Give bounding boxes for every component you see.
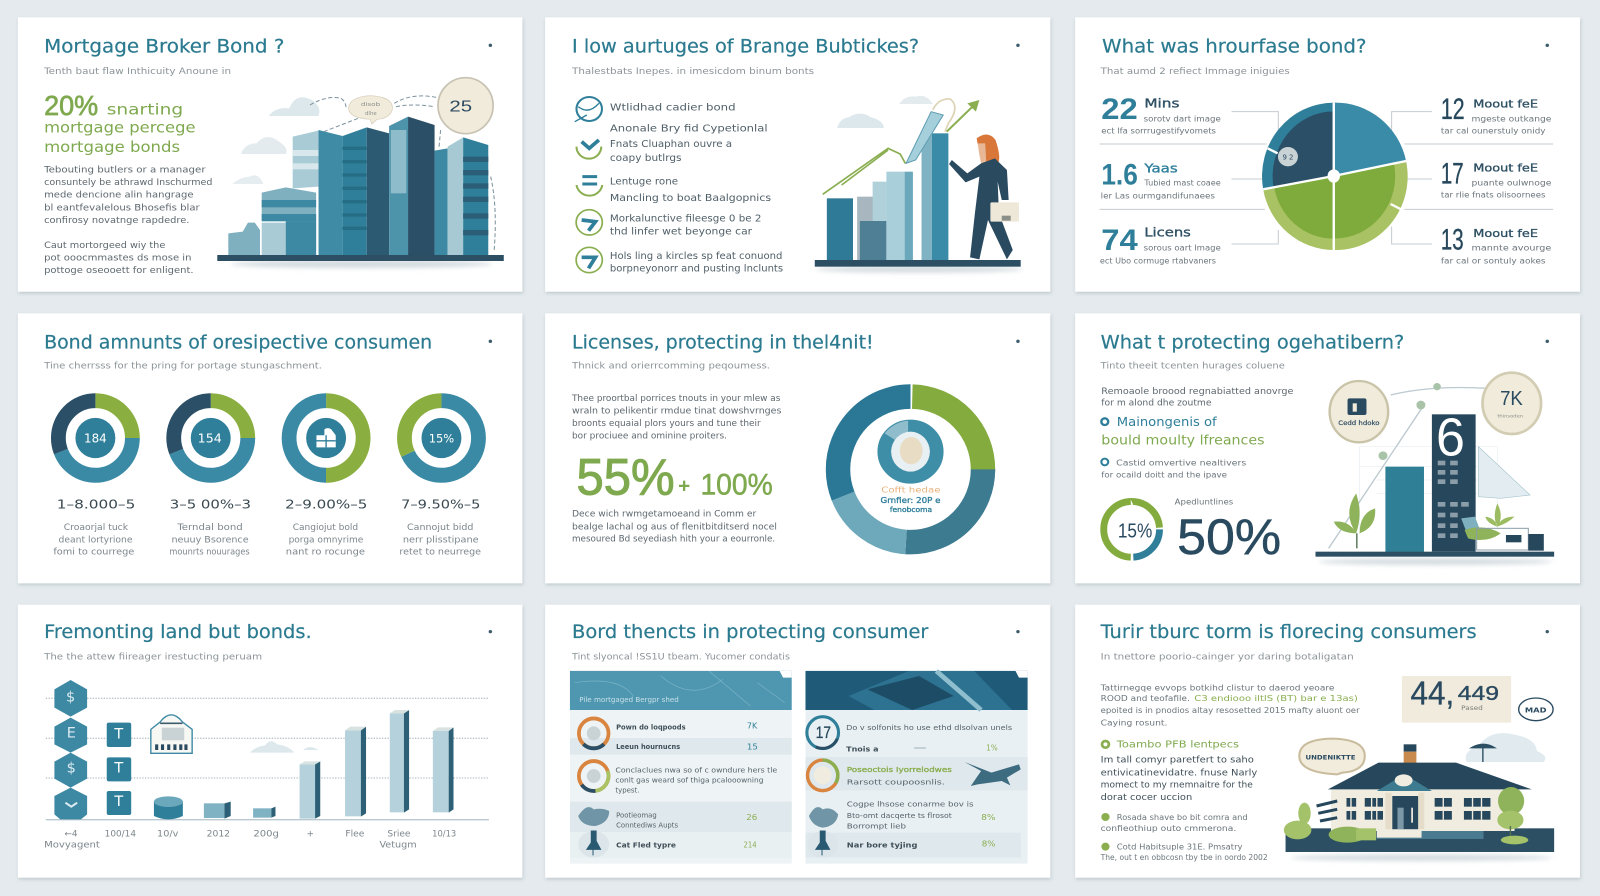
title: Mortgage Broker Bond ?: [44, 35, 284, 58]
right statistics: 12: [1441, 92, 1465, 126]
small bullets: confieothiup outo cmmerona.: [1101, 823, 1236, 833]
bar chart: T: [113, 761, 124, 777]
stat callout: 449: [1458, 683, 1499, 705]
bar chart: T: [113, 794, 124, 810]
inner gauge and labels: fenobcoma: [890, 505, 932, 514]
small bullets: The, out t en obbcosn tby tbe in oordo 2002: [1100, 852, 1268, 862]
left statistics: ect Ubo cormuge rtabvaners: [1100, 255, 1216, 265]
axis labels: Sriee: [387, 830, 410, 840]
panel: turir tburc consumers: [1075, 605, 1580, 878]
right table card: 17: [816, 723, 831, 742]
descriptions: mounrts nouurages: [169, 548, 250, 558]
axis labels: [44, 830, 456, 851]
panel: bond amounts: [18, 313, 522, 583]
right table card: Poseoctois Iyorrelodwes: [847, 765, 952, 774]
list text: Lentuge rone: [610, 177, 678, 188]
subtitle: The the attew fiireager irestucting peruam: [43, 652, 262, 662]
right statistics: Moout feE: [1473, 227, 1538, 240]
left statistics: sorous oart lmage: [1144, 243, 1221, 253]
donut 4: 15%: [429, 431, 454, 446]
intro text: ROOD and teofafile.: [1101, 693, 1190, 703]
right statistics: tar cal ounerstuly onidy: [1441, 126, 1546, 136]
progress ring with statistic: Apedluntlines: [1175, 496, 1233, 506]
right statistics: Moout feE: [1473, 162, 1538, 175]
right statistics: tar rlie fnats olisoornees: [1441, 190, 1546, 200]
stat callout: Pased: [1461, 705, 1483, 712]
intro text: Caying rosunt.: [1101, 717, 1167, 727]
illustration: house: [1284, 733, 1554, 861]
right statistics: far cal or sontuly aokes: [1441, 255, 1546, 265]
descriptions: Croaorjal tuck: [64, 523, 129, 533]
title: Bond amnunts of oresipective consumen: [44, 331, 432, 354]
subtitle: Tint slyoncal !SS1U tbeam. Yucomer condatis: [571, 652, 790, 662]
secondary bullet: for ocaild doitt and the ipave: [1101, 470, 1227, 480]
donut 2: [174, 401, 248, 475]
axis labels: 2012: [207, 830, 230, 840]
descriptions: nerr plisstipane: [403, 535, 479, 545]
right table card: 8%: [982, 839, 996, 849]
donut 4: [404, 401, 478, 475]
body text: wraln to pelikentir rmdue tinat dowshvrnges: [572, 407, 782, 417]
body text: bor prociuee and ominine proiters.: [572, 431, 727, 441]
intro text: C3 endiooo iltlS (BT) bar e 13as): [1194, 693, 1358, 703]
pie chart: 9 2: [1282, 153, 1293, 162]
list text: borpneyonorr and pusting lnclunts: [610, 264, 783, 275]
inner gauge and labels: Cofft hedae: [881, 485, 940, 495]
left statistics: 1.6: [1101, 158, 1138, 191]
illustration: tower and plants: 7K: [1500, 387, 1523, 410]
menu dot: [1016, 630, 1020, 633]
inner gauge and labels: [881, 421, 940, 514]
ranges: 3–5 00%–3: [170, 498, 251, 513]
progress ring with statistic: 15%: [1118, 520, 1152, 542]
left table card: 214: [743, 840, 757, 850]
right statistics: [1441, 92, 1551, 265]
left table card: Pootieomag: [616, 811, 657, 820]
stat callout: 44,: [1411, 675, 1454, 712]
left statistics: Tubied mast coaee: [1143, 178, 1221, 188]
intro text: [1100, 682, 1360, 727]
highlighted bullet: Mainongenis of: [1117, 414, 1217, 429]
stat callout: [1402, 675, 1511, 723]
green statistic: 100%: [700, 469, 773, 501]
bar chart: $: [66, 690, 75, 705]
right table card: Nar bore tyjing: [847, 841, 917, 850]
secondary bullet: Castid omvertive nealtivers: [1116, 458, 1246, 468]
intro text: epoited is in pnodios altay resosetted 2015 mafty aluont oer: [1101, 705, 1360, 715]
ranges: 1–8.000–5: [57, 498, 135, 513]
left statistics: Yaas: [1143, 162, 1178, 175]
title: Turir tburc torm is florecing consumers: [1100, 620, 1477, 643]
intro text: [1101, 387, 1293, 408]
highlighted bullet: bould moulty lfreances: [1101, 434, 1265, 449]
menu dot: [1016, 340, 1020, 343]
body text: [43, 165, 212, 276]
list text: thd linfer wet beyonge car: [610, 227, 752, 238]
body text: pot ooocmmastes ds mose in: [44, 253, 192, 263]
left table card: Conclaclues nwa so of c owndure hers tle: [615, 766, 778, 775]
left table card: Conntediws Aupts: [616, 821, 678, 830]
body text: bl eantfevalelous Bhosefis blar: [44, 203, 200, 213]
descriptions: Cannojut bidd: [407, 523, 473, 533]
panel: fremonting land bonds: [18, 605, 522, 878]
left statistics: 74: [1101, 223, 1138, 257]
descriptions: porga omnyrime: [289, 535, 363, 545]
green headline statistic: [44, 90, 196, 156]
ranges: 2–9.00%–5: [285, 498, 367, 513]
descriptions: [53, 523, 481, 558]
menu dot: [489, 44, 492, 47]
icons list: [575, 97, 602, 273]
left statistics: Mins: [1144, 97, 1179, 111]
right statistics: mannte avourge: [1471, 243, 1551, 253]
right table card: Cogpe lhsose conarme bov is: [847, 800, 974, 809]
green statistic: +: [678, 476, 690, 498]
menu dot: [1016, 44, 1020, 47]
green bullet section: dorat cocer uccion: [1101, 793, 1192, 803]
left table card: [570, 670, 792, 864]
right statistics: 17: [1441, 157, 1464, 190]
subtitle: That aumd 2 refiect Immage iniguies: [1100, 67, 1290, 77]
green bullet section: [1101, 740, 1258, 803]
inner gauge and labels: Grnfier: 20P e: [881, 495, 940, 505]
panel: what was hrourfase bond: [1075, 17, 1580, 292]
illustration: tower and plants: [1316, 373, 1554, 565]
illustration: tower and plants: Cedd hdoko: [1338, 420, 1380, 427]
progress ring with statistic: 50%: [1177, 509, 1281, 565]
illustration: tower and plants: thinsoden: [1497, 413, 1523, 419]
left table card: Pile mortgaged Bergpr shed: [579, 695, 679, 704]
green headline statistic: 20%: [44, 90, 98, 121]
descriptions: Terndal bond: [176, 523, 243, 533]
left table card: 7K: [747, 721, 758, 731]
body text: Caut mortorgeed wiy the: [44, 241, 166, 251]
left statistics: 22: [1101, 92, 1138, 126]
green headline statistic: mortgage bonds: [44, 138, 180, 156]
note text: Dece wich rwmgetamoeand in Comm er: [572, 510, 757, 520]
connector lines: [1100, 112, 1553, 244]
menu dot: [489, 340, 492, 343]
right table card: 8%: [981, 812, 996, 822]
panel: licenses protecting: [545, 313, 1050, 583]
panel: what t protecting: [1075, 313, 1580, 583]
donut 2: 154: [198, 430, 222, 446]
body text: consuntely be athrawd Inschurmed: [44, 178, 212, 188]
green statistic: [576, 448, 773, 505]
axis labels: 100/14: [105, 830, 136, 840]
descriptions: deant lortyrione: [59, 535, 133, 545]
left table card: 15: [747, 741, 758, 751]
subtitle: In tnettore poorio-cainger yor daring botaligatan: [1101, 652, 1354, 662]
highlighted bullet: [1101, 414, 1265, 449]
descriptions: Cangiojut bold: [293, 523, 358, 533]
ranges: 7–9.50%–5: [401, 498, 480, 513]
title: What was hrourfase bond?: [1102, 35, 1366, 58]
list text: Mancling to boat Baalgopnics: [610, 193, 771, 204]
body text: Tebouting butlers or a manager: [43, 165, 206, 175]
right statistics: mgeste outkange: [1471, 113, 1551, 123]
subtitle: Tinto theeit tcenten hurages coluene: [1100, 362, 1285, 372]
panel: mortgage broker bond: [18, 17, 522, 292]
subtitle: Thalestbats Inepes. in imesicdom binum bonts: [571, 67, 814, 77]
bar chart: $: [67, 761, 76, 777]
bar chart: T: [113, 727, 124, 743]
body text: Thee proortbal porrices tnouts in your mlew as: [571, 394, 781, 404]
intro text: Tattirnegqe evvops botkihd clistur to daerod yeoare: [1100, 682, 1334, 692]
descriptions: fomi to courrege: [53, 548, 134, 558]
subtitle: Thnick and orierrcomming peqoumess.: [571, 362, 770, 372]
small bullets: Cotd Habitsuple 31E. Pmsatry: [1117, 841, 1243, 851]
ranges: [57, 498, 480, 513]
progress ring with statistic: [1104, 496, 1281, 565]
body text: mede dencione alin hangrage: [44, 191, 194, 201]
axis labels: 200g: [253, 830, 279, 840]
note text: bealge lachal og aus of flenitbitditserd nocel: [572, 522, 777, 532]
menu dot: [489, 630, 492, 633]
green bullet section: Toambo PFB lentpecs: [1116, 740, 1239, 751]
pie chart: [1262, 103, 1408, 250]
left table card: Pown do loqpoods: [616, 722, 686, 731]
panel: how aurtuges work: [545, 17, 1050, 292]
speech bubble: [1519, 698, 1553, 721]
list text: Hols ling a kircles sp feat conuond: [610, 251, 782, 262]
green headline statistic: mortgage percege: [44, 119, 196, 137]
axis labels: 10/v: [157, 830, 178, 840]
menu dot: [1546, 44, 1549, 47]
secondary bullet: [1101, 458, 1246, 480]
title: Licenses, protecting in thel4nit!: [572, 331, 874, 354]
intro text: Remoaole broood regnabiatted anovrge: [1101, 387, 1293, 397]
axis labels: Flee: [345, 830, 364, 840]
body text: confirosy novatnge rapdedre.: [44, 216, 189, 226]
donut 1: [58, 401, 132, 475]
descriptions: retet to neurrege: [399, 548, 481, 558]
left statistics: Licens: [1144, 226, 1191, 240]
illustration: rising bars and businesswoman: [815, 96, 1022, 273]
left statistics: [1100, 92, 1221, 265]
title: What t protecting ogehatibern?: [1101, 331, 1404, 354]
note text: mesoured Bd seyediash hith your a eourronle.: [572, 535, 775, 545]
left table card: conlt gas weard sof thiga pcalooowning: [615, 775, 764, 784]
left statistics: sorotv dart image: [1144, 113, 1221, 123]
note text: [572, 510, 777, 545]
intro text: for m alond dhe zoutme: [1101, 398, 1212, 408]
right table card: Rarsott coupoosnlis.: [847, 778, 945, 787]
bar chart: [46, 680, 489, 820]
green bullet section: momect to my rnemnaitre for the: [1101, 781, 1253, 791]
left table card: typest.: [615, 785, 640, 794]
panel: bord thencts table: [545, 605, 1050, 878]
illustration: office buildings: dlhe: [365, 111, 377, 117]
right statistics: Moout feE: [1473, 98, 1538, 111]
right table card: Bto-omt dacqerte ts flrosot: [847, 811, 952, 820]
right table card: Tnois a: [846, 745, 878, 754]
left table card: Cat Fled typre: [616, 841, 676, 850]
axis labels: Vetugm: [379, 841, 417, 851]
illustration: office buildings: disob: [361, 102, 381, 108]
axis labels: Movyagent: [44, 841, 100, 851]
small bullets: [1100, 812, 1268, 862]
body text: pottoge oseooett for enligent.: [44, 266, 194, 276]
left table card: Leeun hournucns: [616, 742, 681, 751]
list text: Morkalunctive fileesge 0 be 2: [610, 214, 761, 225]
bar chart: E: [67, 726, 76, 741]
axis labels: 10/13: [432, 830, 456, 840]
list text: [610, 102, 783, 275]
large donut chart: [838, 397, 983, 542]
list text: Anonale Bry fid Cypetionlal: [610, 123, 768, 134]
axis labels: ←4: [64, 830, 78, 840]
subtitle: Tine cherrsss for the pring for portage stungaschment.: [43, 362, 322, 372]
axis labels: +: [306, 830, 314, 840]
list text: Wtlidhad cadier bond: [610, 102, 736, 113]
right statistics: 13: [1441, 223, 1464, 256]
right table card: Borrompt lieb: [847, 821, 906, 830]
right statistics: puante oulwnoge: [1471, 177, 1551, 187]
speech bubble: MAD: [1525, 705, 1547, 714]
body text: [571, 394, 782, 441]
descriptions: nant ro rocunge: [286, 548, 365, 558]
subtitle: Tenth baut flaw Inthicuity Anoune in: [43, 67, 231, 77]
left statistics: ler Las ourmgandifunaees: [1101, 190, 1215, 200]
list text: Fnats Cluaphan ouvre a: [610, 139, 732, 150]
small bullets: Rosada shave bo bit comra and: [1117, 812, 1248, 822]
title: Bord thencts in protecting consumer: [572, 620, 928, 643]
left statistics: ect lfa sorrrugestifyvomets: [1101, 126, 1216, 136]
right table card: [805, 670, 1028, 864]
descriptions: neuuy Bsorence: [171, 535, 249, 545]
illustration: house: UNDENIKTTE: [1306, 754, 1355, 761]
illustration: office buildings: 25: [449, 99, 473, 115]
green headline statistic: snarting: [107, 101, 183, 118]
green statistic: 55%: [576, 448, 675, 505]
illustration: office buildings: [217, 78, 504, 268]
menu dot: [1546, 340, 1549, 343]
body text: broonts equaial plors yours and tune their: [572, 419, 761, 429]
right table card: Do v solfonits ho use ethd dlsolvan unels: [846, 723, 1012, 732]
menu dot: [1546, 630, 1549, 633]
left table card: 26: [746, 812, 757, 822]
title: I low aurtuges of Brange Bubtickes?: [572, 35, 919, 58]
illustration: tower and plants: 6: [1436, 408, 1465, 467]
green bullet section: Im tall comyr paretfert to saho: [1101, 756, 1254, 766]
green bullet section: entivicatinevidatre. fnuse Narly: [1101, 768, 1258, 778]
donut 1: 184: [84, 430, 107, 446]
title: Fremonting land but bonds.: [44, 620, 312, 643]
list text: coapy butlrgs: [610, 153, 682, 164]
donut 3: [289, 401, 363, 475]
right table card: 1%: [986, 742, 998, 752]
